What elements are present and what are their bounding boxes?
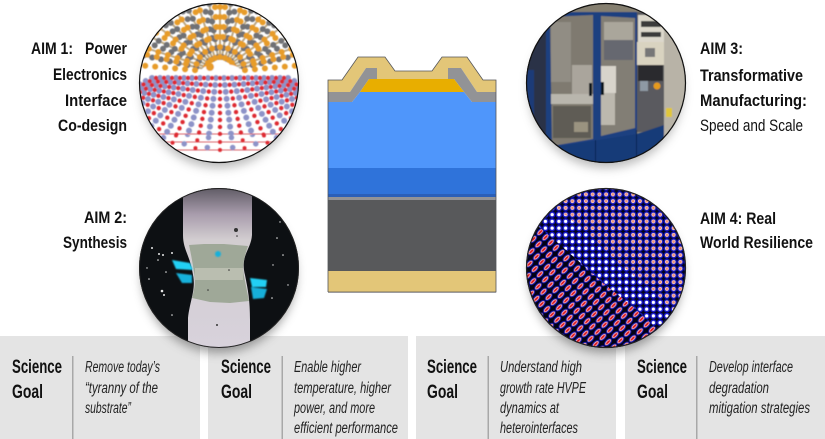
heading: science goal 1: Science [12,357,62,378]
image: synthesis reactor [139,180,299,353]
text: goal 2 description [293,359,398,437]
lower lavender atoms near [139,74,299,136]
lower lavender atoms far [160,134,278,151]
heading: science goal 4: Science [637,357,687,378]
diagram: device cross-section [328,57,496,293]
text: goal 2 description: temperature, higher [294,380,392,397]
text: goal 3 description: Understand high [500,359,582,376]
label: aim 4 [700,209,813,252]
image: atomic interface structure [136,2,302,174]
far right wall [663,30,685,138]
heading: science goal 2: Goal [221,382,252,403]
text: goal 2 description: Enable higher [294,359,362,376]
lower bonds [140,134,298,150]
heading: science goal 1 [12,357,62,403]
text: goal 1 description: substrate” [85,400,132,417]
text: goal 4 description: degradation [709,380,769,397]
right panel [637,12,664,132]
text: goal 4 description [709,359,810,417]
grown region [189,244,249,303]
heading: science goal 3 [427,357,477,403]
label: aim 1: Interface [65,91,127,110]
label: aim 2: Synthesis [63,233,127,252]
text: goal 1 description: “tyranny of the [85,380,158,397]
specks [146,221,289,316]
text: goal 3 description [500,359,586,437]
image: atomic lattice micrograph [522,188,690,359]
upper gray atoms [143,3,295,70]
text: goal 3 description: heterointerfaces [500,420,578,437]
heading: science goal 3: Goal [427,382,458,403]
upper orange atoms [142,4,298,74]
label: aim 3: Transformative [700,66,803,85]
text: goal 2 description: efficient performance [294,420,398,437]
heading: science goal 4: Goal [637,382,668,403]
heading: science goal 1: Goal [12,382,43,403]
label: aim 3: Manufacturing: [700,91,807,110]
label: aim 3: AIM 3: [700,39,743,58]
text: goal 3 description: dynamics at [500,400,559,417]
column specks [207,228,238,326]
panel: science goal 4 [625,336,825,439]
label: aim 1: Co-design [58,116,127,135]
heading: science goal 3: Science [427,357,477,378]
label: aim 1: Electronics [53,65,127,84]
panel: science goal 3 [416,336,616,439]
chamber [572,65,592,100]
label: aim 4: AIM 4: Real [700,209,776,228]
heading: science goal 2 [221,357,271,403]
heading: science goal 4 [637,357,687,403]
upper bonds [148,4,292,70]
label: aim 1: AIM 1: [31,39,73,58]
label: aim 1: Power [85,39,127,58]
text: goal 1 description: Remove today’s [85,359,160,376]
lower red atoms far [170,134,270,153]
panel: science goal 1 [0,336,200,439]
door frames [546,12,638,148]
label: aim 2 [63,208,127,252]
image: manufacturing tool [520,0,694,170]
cyan blobs [172,251,267,299]
centre gap [201,64,241,78]
column [183,180,252,350]
heading: science goal 2: Science [221,357,271,378]
panel: science goal 2 [208,336,408,439]
text: goal 2 description: power, and more [293,400,375,417]
label: aim 1 [31,39,127,135]
base panels [595,125,664,161]
text: goal 1 description [85,359,160,417]
label: aim 3 [700,39,807,135]
lower red atoms near [139,75,299,136]
text: goal 3 description: growth rate HVPE [500,380,586,397]
label: aim 2: AIM 2: [84,208,127,227]
